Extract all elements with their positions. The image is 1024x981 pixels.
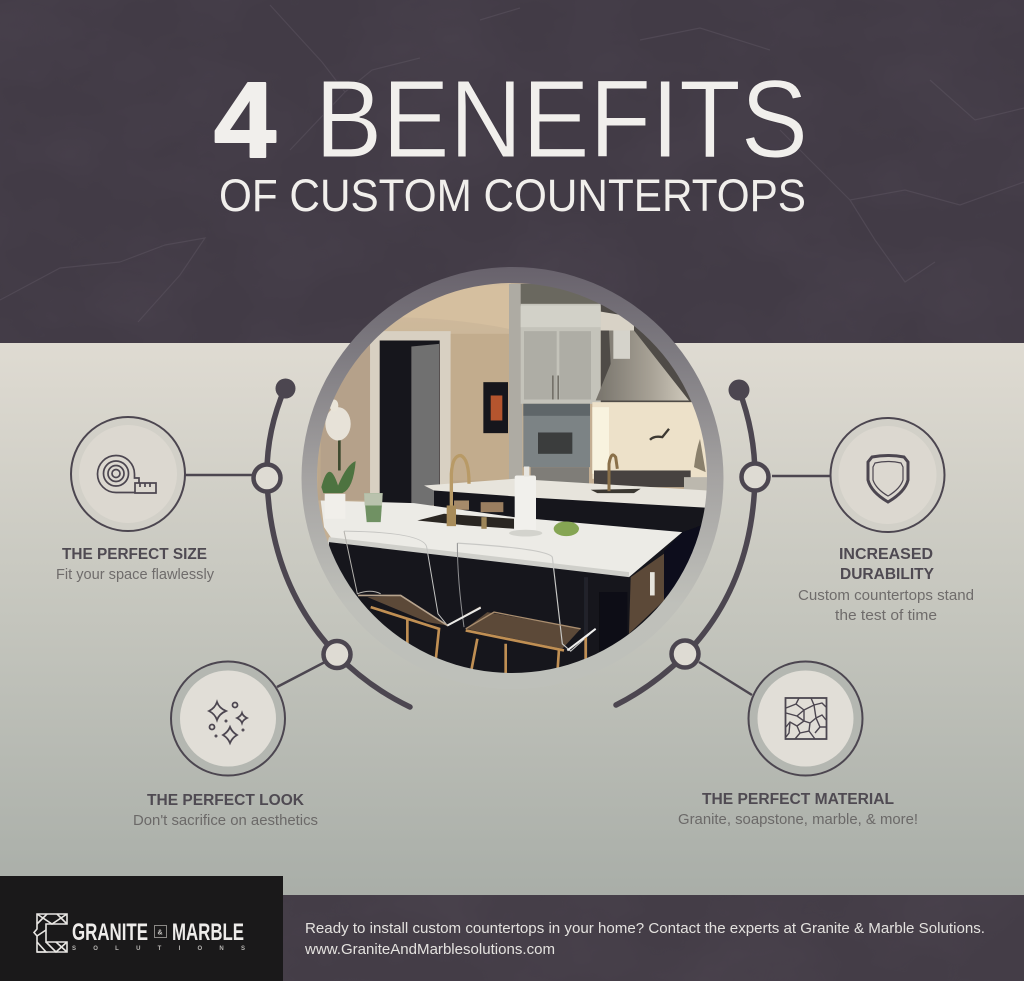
logo wordmark: GRANITE <box>72 919 148 946</box>
icon circle: durability <box>830 418 944 532</box>
text: durability description <box>798 587 974 624</box>
icon circle: size <box>71 417 185 531</box>
node: material <box>672 640 698 668</box>
arc: right <box>616 390 755 705</box>
title: 4 <box>214 59 276 180</box>
panel: dark marble header <box>0 0 1024 343</box>
node: look <box>324 641 350 668</box>
panel: footer band <box>0 895 1024 981</box>
heading: material: THE PERFECT MATERIAL <box>702 791 894 808</box>
icon: stone tiles <box>786 698 826 739</box>
benefit: the perfect size <box>56 417 280 583</box>
icon: tape measure <box>98 456 156 493</box>
title: BENEFITS <box>315 58 808 181</box>
logo wordmark: MARBLE <box>172 919 244 946</box>
icon circle: look <box>171 662 285 776</box>
arc end dots <box>276 378 750 400</box>
heading: size: THE PERFECT SIZE <box>62 546 207 563</box>
heading: durability <box>839 546 935 583</box>
kitchen photo <box>317 283 707 673</box>
logo panel <box>0 876 283 981</box>
heading: durability: DURABILITY <box>840 566 935 583</box>
logo wordmark: SOLUTIONS <box>72 946 245 952</box>
photo ring <box>302 267 724 689</box>
text: material description: Granite, soapstone, marble, & more! <box>678 811 918 828</box>
text: look description: Don't sacrifice on aesthetics <box>133 812 318 829</box>
icon: shield <box>868 456 908 502</box>
panel: light gradient body <box>0 343 1024 895</box>
footer call to action <box>304 920 985 958</box>
title <box>214 58 808 221</box>
benefit: the perfect look <box>133 641 350 829</box>
logo wordmark: & <box>158 930 163 936</box>
logo icon <box>34 914 67 952</box>
node: durability <box>742 464 768 490</box>
title: OF CUSTOM COUNTERTOPS <box>219 170 806 221</box>
benefit: the perfect material <box>672 640 918 828</box>
node: size <box>254 464 280 492</box>
arc: left <box>267 388 410 707</box>
decorative arcs <box>267 388 755 707</box>
text: durability description: Custom countertops stand <box>798 587 974 604</box>
footer call to action: Ready to install custom countertops in your home? Contact the experts at Granite & Marble Solutions. <box>305 920 985 937</box>
icon circle: material <box>748 662 862 776</box>
benefit: increased durability <box>742 418 974 624</box>
logo wordmark <box>72 919 245 952</box>
heading: look: THE PERFECT LOOK <box>147 792 305 809</box>
text: durability description: the test of time <box>835 607 937 624</box>
footer call to action: www.GraniteAndMarblesolutions.com <box>304 941 555 958</box>
icon: sparkles <box>209 702 247 743</box>
text: size description: Fit your space flawlessly <box>56 566 214 583</box>
heading: durability: INCREASED <box>839 546 933 563</box>
